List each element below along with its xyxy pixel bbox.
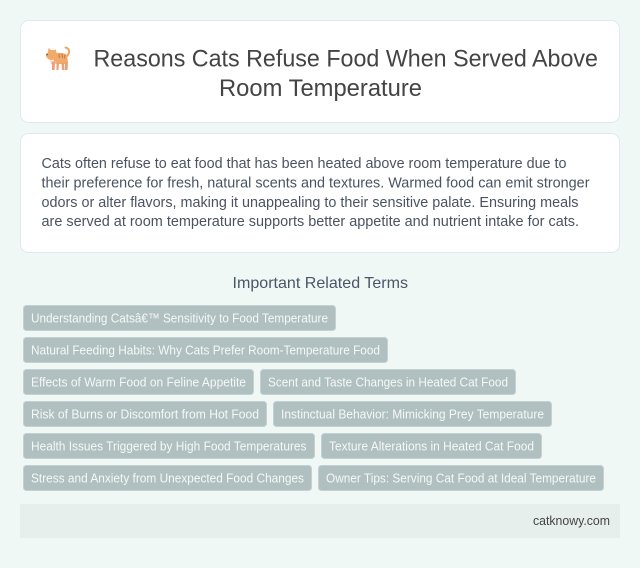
icon: cat <box>46 48 69 70</box>
tag <box>24 402 266 426</box>
tag <box>274 402 552 426</box>
tag: Health Issues Triggered by High Food Temperatures <box>31 438 307 453</box>
tag: Stress and Anxiety from Unexpected Food Changes <box>31 470 304 485</box>
description line 4: are served at room temperature supports better appetite and nutrient intake for cats. <box>42 214 579 230</box>
tag: Scent and Taste Changes in Heated Cat Food <box>268 374 508 389</box>
tag <box>24 306 336 330</box>
tag: Effects of Warm Food on Feline Appetite <box>31 374 246 389</box>
tag <box>24 370 254 394</box>
tag <box>24 434 314 458</box>
heading: important related terms: Important Related Terms <box>232 275 408 292</box>
panel: title card <box>20 20 620 122</box>
tag: Natural Feeding Habits: Why Cats Prefer Room-Temperature Food <box>31 342 380 357</box>
description line 1: Cats often refuse to eat food that has been heated above room temperature due to <box>42 156 566 172</box>
footer <box>20 504 620 538</box>
panel: description card <box>20 134 620 252</box>
description line 2: their preference for fresh, natural scents and textures. Warmed food can emit stronger <box>42 176 590 192</box>
footer site name: catknowy.com <box>533 513 610 528</box>
tag: Instinctual Behavior: Mimicking Prey Temperature <box>281 406 544 421</box>
tag <box>318 466 604 490</box>
tag list <box>24 306 604 490</box>
tag <box>24 338 388 362</box>
tag: Understanding Catsâ€™ Sensitivity to Food Temperature <box>31 310 328 325</box>
tag <box>322 434 542 458</box>
title line 1: Reasons Cats Refuse Food When Served Above <box>94 46 598 72</box>
tag: Texture Alterations in Heated Cat Food <box>329 438 534 453</box>
tag <box>260 370 516 394</box>
description line 3: odors or alter flavors, making it unappealing to their sensitive palate. Ensuring meals <box>42 195 578 211</box>
tag <box>24 466 312 490</box>
tag: Risk of Burns or Discomfort from Hot Food <box>31 406 259 421</box>
tag: Owner Tips: Serving Cat Food at Ideal Temperature <box>326 470 596 485</box>
title line 2: Room Temperature <box>219 75 422 102</box>
